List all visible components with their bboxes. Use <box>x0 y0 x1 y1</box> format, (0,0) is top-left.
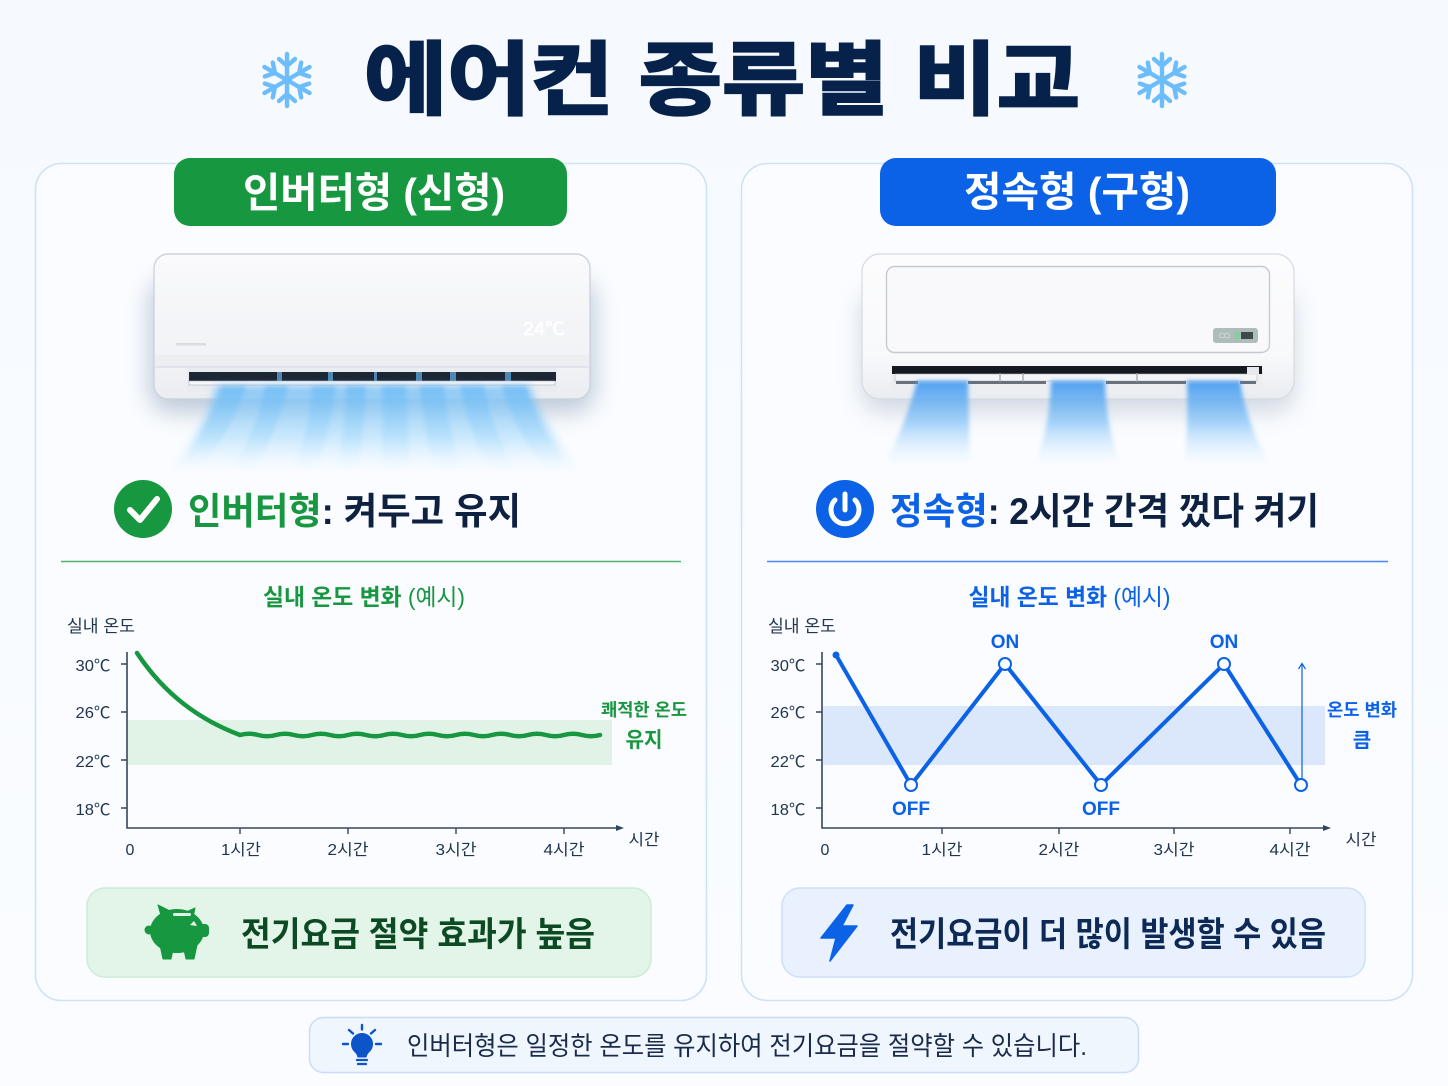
chart: inverter temperature: 유지 <box>626 729 662 752</box>
airflow <box>168 386 582 472</box>
panel: fixed speed type <box>742 158 1412 1000</box>
title <box>260 36 1189 125</box>
chart: fixed speed temperature <box>768 584 1397 859</box>
footer tip: 인버터형은 일정한 온도를 유지하여 전기요금을 절약할 수 있습니다. <box>407 1031 1087 1061</box>
icon: light bulb <box>343 1025 381 1064</box>
chart: inverter temperature <box>67 584 687 859</box>
chart: inverter temperature: 26℃ <box>76 705 110 722</box>
fixed speed header badge: 정속형 (구형) <box>964 169 1190 215</box>
callout: savings <box>87 888 651 977</box>
status line: inverter: 인버터형: 켜두고 유지 <box>188 491 521 532</box>
chart: fixed speed temperature: 온도 변화 <box>1327 700 1397 720</box>
panel: inverter type <box>36 158 706 1000</box>
panel frame <box>742 164 1412 1000</box>
temperature line <box>137 653 600 736</box>
chart: fixed speed temperature: 큼 <box>1353 730 1371 752</box>
inverter header badge: 인버터형 (신형) <box>243 170 505 216</box>
comfort band <box>128 720 612 765</box>
chart: inverter temperature: 1시간 <box>221 841 261 859</box>
inverter header badge <box>174 158 567 226</box>
icon: piggy bank <box>144 905 209 959</box>
chart: fixed speed temperature: 4시간 <box>1270 841 1311 859</box>
chart: fixed speed temperature: 22℃ <box>770 754 806 771</box>
callout: higher cost: 전기요금이 더 많이 발생할 수 있음 <box>890 916 1326 954</box>
fixed speed header badge <box>880 158 1276 226</box>
chart: inverter temperature: 18℃ <box>76 802 110 819</box>
icon: left snowflake <box>260 54 314 106</box>
chart: fixed speed temperature: 시간 <box>1346 831 1377 849</box>
chart: inverter temperature: 실내 온도 변화 (예시) <box>263 584 465 610</box>
callout: higher cost <box>782 888 1365 977</box>
chart: inverter temperature: 4시간 <box>544 841 585 859</box>
airflow <box>885 381 1270 465</box>
icon: power button <box>816 480 874 538</box>
chart: fixed speed temperature: OFF <box>892 799 930 820</box>
footer tip <box>310 1018 1138 1072</box>
chart: inverter temperature: 시간 <box>628 831 660 849</box>
chart: inverter temperature: 3시간 <box>436 841 477 859</box>
chart: inverter temperature: 쾌적한 온도 <box>601 700 687 720</box>
arrow: temperature swing <box>1298 664 1306 779</box>
chart: fixed speed temperature: ON <box>991 632 1019 653</box>
variation band <box>823 706 1325 765</box>
chart: fixed speed temperature: 0 <box>821 842 830 859</box>
chart: inverter temperature: 2시간 <box>328 841 369 859</box>
icon: check mark <box>114 480 172 538</box>
chart: fixed speed temperature: ON <box>1210 632 1238 653</box>
chart: fixed speed temperature: 실내 온도 <box>768 617 836 636</box>
illustration: inverter air conditioner <box>150 254 594 472</box>
chart: fixed speed temperature: 1시간 <box>922 841 963 859</box>
status line: fixed speed <box>816 480 1319 538</box>
chart: inverter temperature: 0 <box>126 842 135 859</box>
display: 24°C: 24℃ <box>523 319 565 339</box>
chart: fixed speed temperature: 실내 온도 변화 (예시) <box>968 584 1171 610</box>
temperature line <box>836 655 1301 785</box>
panel frame <box>36 164 706 1000</box>
chart: inverter temperature: 22℃ <box>76 754 110 771</box>
title text: 에어컨 종류별 비교 <box>364 36 1080 125</box>
chart: fixed speed temperature: 3시간 <box>1154 841 1195 859</box>
status line: fixed speed: 정속형: 2시간 간격 껐다 켜기 <box>890 491 1319 532</box>
icon: right snowflake <box>1135 54 1189 106</box>
chart: inverter temperature: 30℃ <box>76 658 110 675</box>
chart: inverter temperature: 실내 온도 <box>67 617 135 636</box>
chart: fixed speed temperature: 26℃ <box>770 705 806 722</box>
chart: fixed speed temperature: 30℃ <box>770 658 806 675</box>
chart: fixed speed temperature: OFF <box>1082 799 1120 820</box>
display panel <box>1213 328 1258 343</box>
status line: inverter <box>114 480 521 538</box>
icon: lightning bolt <box>821 905 857 961</box>
illustration: fixed speed air conditioner <box>862 254 1294 465</box>
callout: savings: 전기요금 절약 효과가 높음 <box>241 916 595 954</box>
chart: fixed speed temperature: 18℃ <box>770 802 806 819</box>
chart: fixed speed temperature: 2시간 <box>1038 841 1080 859</box>
